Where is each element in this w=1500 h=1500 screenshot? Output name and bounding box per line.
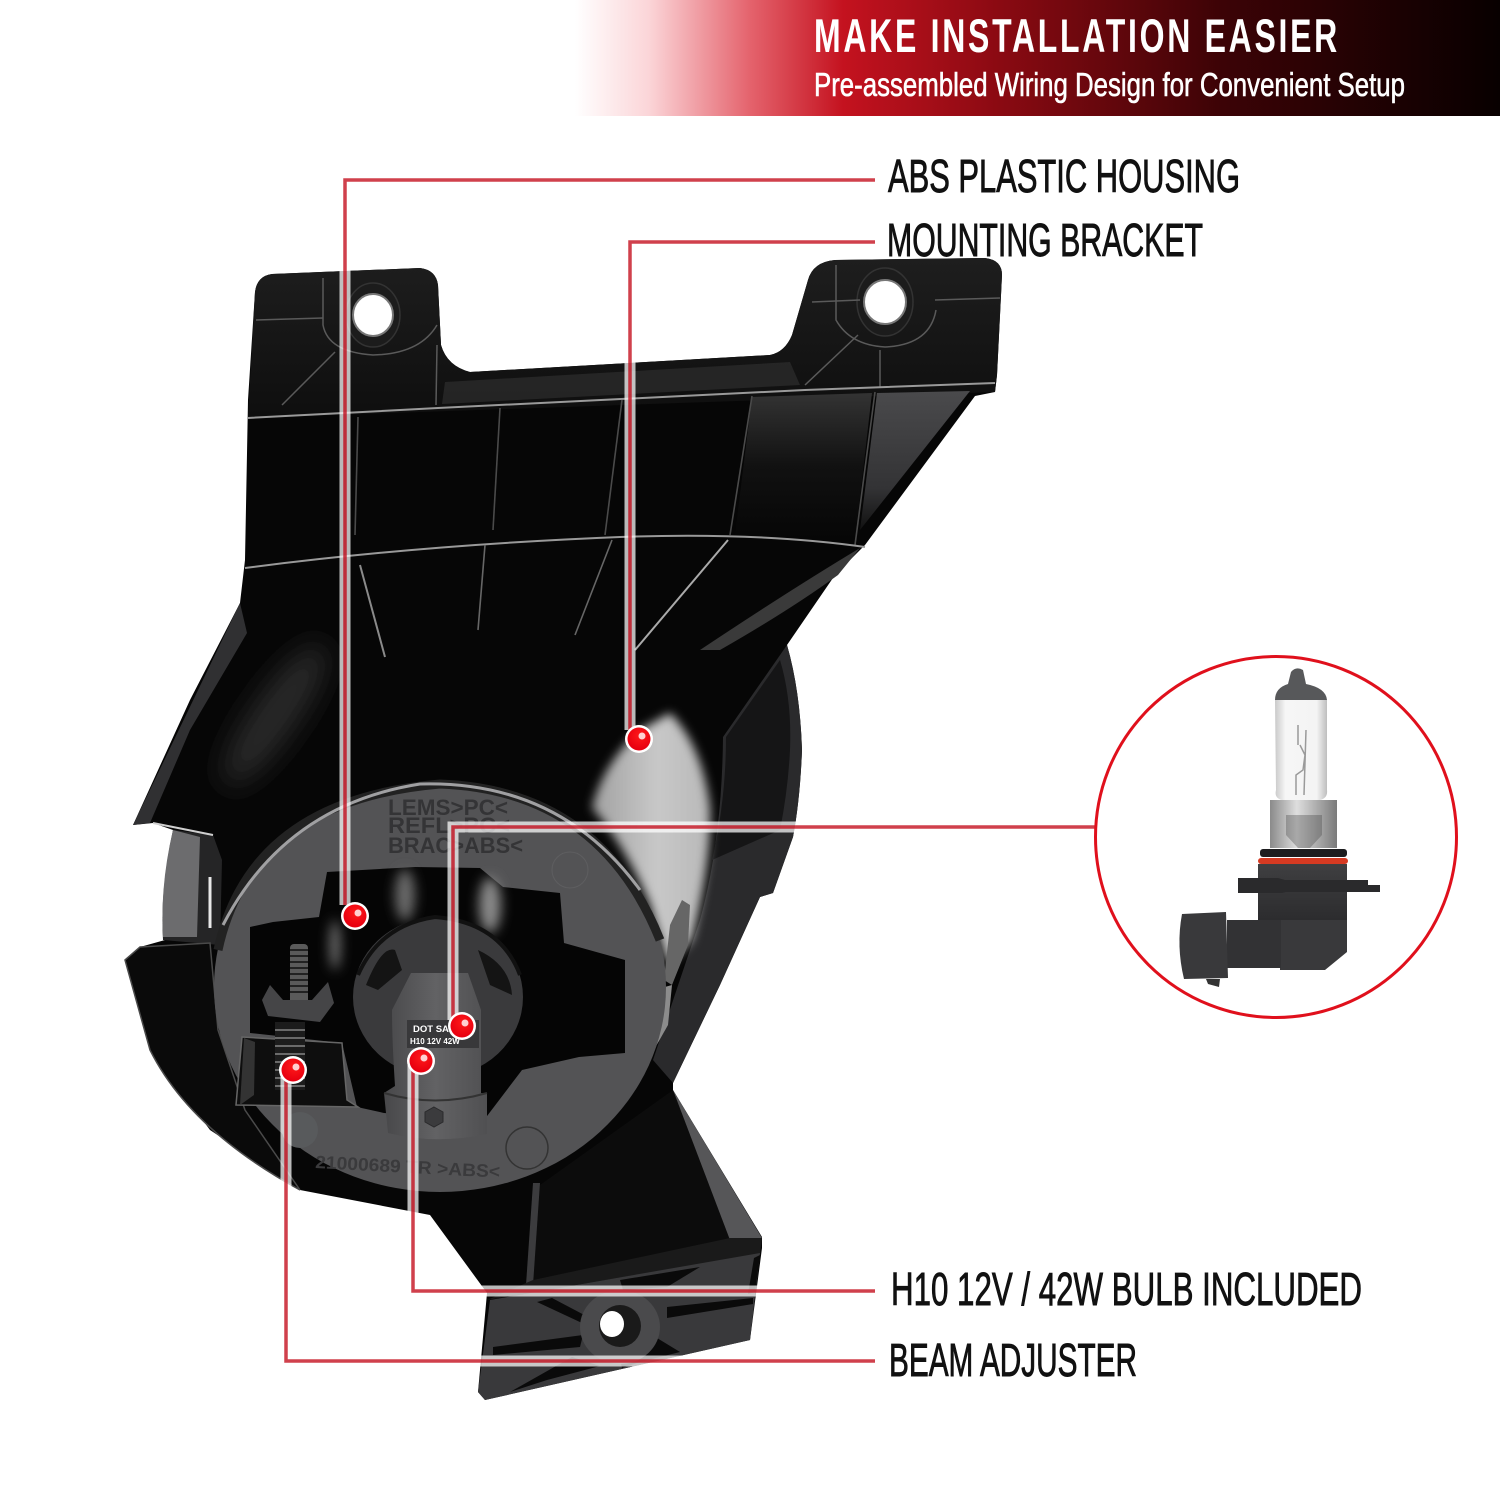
callout line: beam adjuster bbox=[286, 1075, 875, 1361]
mounting tabs bbox=[248, 258, 1002, 418]
lower left flange bbox=[125, 943, 300, 1190]
right glossy panel bbox=[860, 391, 970, 530]
molded circles bbox=[506, 1127, 548, 1169]
marker dot: H10 bulb bbox=[407, 1047, 435, 1075]
left edge strip bbox=[133, 603, 247, 825]
header banner bbox=[575, 0, 1500, 116]
right tab hole bbox=[857, 268, 913, 336]
fog lamp product bbox=[125, 258, 1002, 1400]
marker dot: bracket bbox=[625, 725, 653, 753]
label: mounting bracket: MOUNTING BRACKET bbox=[887, 214, 1203, 266]
H10 bulb illustration bbox=[1179, 668, 1380, 987]
arm side panel bbox=[673, 1090, 762, 1240]
arm gloss panel bbox=[533, 1090, 730, 1280]
arm rib bbox=[526, 1183, 540, 1285]
label: ABS plastic housing: ABS PLASTIC HOUSING bbox=[888, 150, 1240, 202]
bottom mounting arm bbox=[478, 1090, 762, 1400]
bracket band edge bbox=[248, 383, 995, 418]
beam adjuster screw bbox=[262, 944, 334, 1090]
diagonal gloss fin bbox=[700, 548, 860, 650]
callout line: bulb circle bbox=[453, 827, 1095, 1020]
marker dot: bulb socket bbox=[448, 1012, 476, 1040]
lens outer shell bbox=[653, 645, 802, 1083]
embossed disc text top: REFL>PC< bbox=[388, 813, 510, 838]
adjuster bracket bbox=[236, 1037, 358, 1107]
marker dot: beam adjuster bbox=[279, 1056, 307, 1084]
embossed disc text bottom: 21000689 TR >ABS< bbox=[315, 1152, 501, 1182]
tab rib lines bbox=[256, 265, 1000, 405]
body reflection bbox=[592, 713, 710, 965]
embossed disc text top: LEMS>PC< bbox=[388, 795, 508, 820]
callout line: mounting bracket bbox=[630, 242, 875, 730]
panel inner gloss bbox=[735, 393, 872, 540]
disc cavity bbox=[250, 867, 625, 1120]
bulb connector bbox=[384, 973, 487, 1139]
bulb socket ring bbox=[353, 917, 523, 1077]
callout line: H10 bulb bbox=[413, 1065, 875, 1291]
band highlight bbox=[442, 362, 800, 404]
connector label bbox=[407, 1020, 479, 1048]
embossed disc text top bbox=[388, 795, 523, 858]
plate channels bbox=[493, 1255, 760, 1392]
shell inner panel bbox=[712, 660, 790, 860]
lens side window bbox=[153, 823, 222, 945]
plate washer and hole bbox=[580, 1290, 660, 1364]
callout line: ABS plastic housing bbox=[345, 180, 875, 905]
arm lip bbox=[487, 1238, 762, 1300]
lens housing sheen bbox=[208, 633, 342, 797]
connector label: DOT SAE bbox=[413, 1024, 455, 1035]
left tab hole bbox=[346, 283, 400, 347]
label: beam adjuster: BEAM ADJUSTER bbox=[889, 1334, 1137, 1386]
lamp silhouette bbox=[125, 258, 1002, 1400]
upper ribs bbox=[245, 392, 875, 657]
embossed disc text top: BRAC>ABS< bbox=[388, 833, 523, 858]
bulb inset circle bbox=[1096, 656, 1456, 1018]
cavity reflections bbox=[330, 869, 501, 970]
arm plate bbox=[478, 1253, 760, 1400]
marker dot: housing bbox=[341, 902, 369, 930]
rear disc bbox=[214, 782, 666, 1192]
connector label: H10 12V 42W bbox=[410, 1037, 460, 1046]
side glass slits right bbox=[650, 900, 690, 1048]
